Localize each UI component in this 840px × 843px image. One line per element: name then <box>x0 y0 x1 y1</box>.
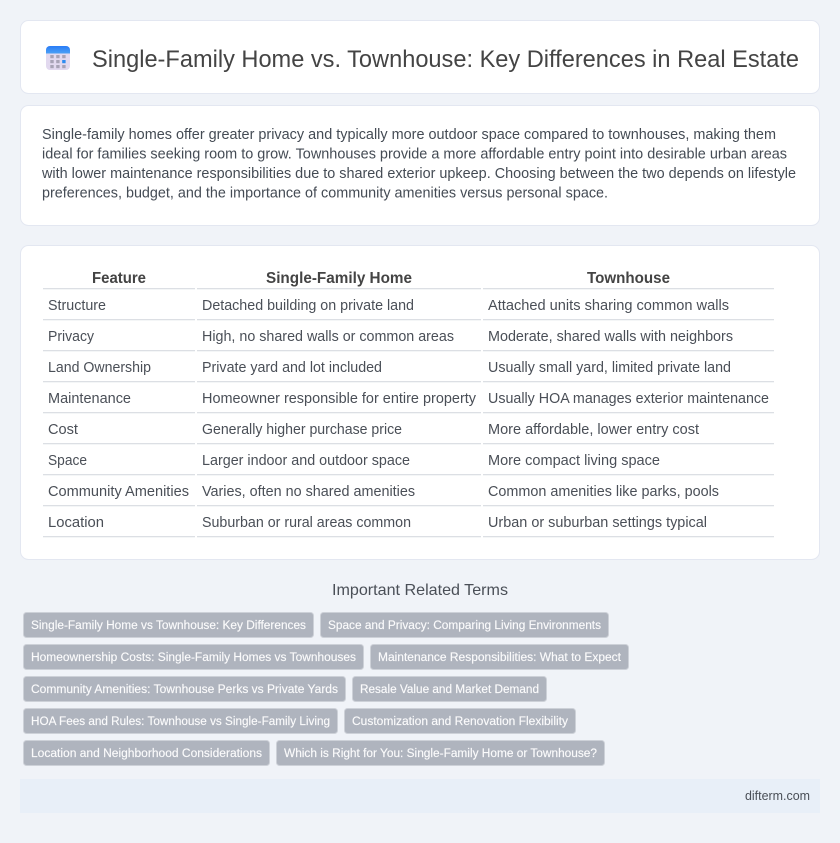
row: maintenance <box>48 391 769 407</box>
footer site name: difterm.com <box>745 789 810 803</box>
tag: Single-Family Home vs Townhouse: Key Differences <box>31 618 306 632</box>
row: privacy: High, no shared walls or common areas <box>202 329 454 345</box>
row: location: Location <box>48 515 104 531</box>
row: land ownership: Land Ownership <box>48 360 151 376</box>
row: cost: Cost <box>48 422 78 438</box>
row: structure: Attached units sharing common walls <box>488 298 729 314</box>
row: land ownership: Private yard and lot included <box>202 360 382 376</box>
header panel <box>20 20 820 94</box>
row: maintenance: Usually HOA manages exterior maintenance <box>488 391 769 407</box>
text block: introduction <box>41 127 796 202</box>
footer <box>20 779 820 813</box>
tag <box>24 644 364 670</box>
row: space: Space <box>48 453 87 469</box>
tag: Customization and Renovation Flexibility <box>352 714 569 728</box>
table header row <box>92 270 670 287</box>
row: location: Suburban or rural areas common <box>202 515 411 531</box>
tag <box>24 740 270 766</box>
row: maintenance: Homeowner responsible for entire property <box>202 391 477 407</box>
tag: Resale Value and Market Demand <box>360 682 539 696</box>
row: structure <box>48 298 729 314</box>
table header row: Single-Family Home <box>266 270 412 287</box>
row: space: Larger indoor and outdoor space <box>202 453 410 469</box>
tag <box>344 708 576 734</box>
tag: Maintenance Responsibilities: What to Expect <box>378 650 622 664</box>
row: privacy <box>48 329 733 345</box>
row: location <box>48 515 707 531</box>
row: privacy: Moderate, shared walls with neighbors <box>488 329 733 345</box>
table header row: Feature <box>92 270 146 287</box>
tag: Space and Privacy: Comparing Living Environments <box>328 618 601 632</box>
tag <box>276 740 604 766</box>
table row lines <box>43 288 774 537</box>
row: community amenities: Community Amenities <box>48 484 189 500</box>
heading: important related terms: Important Related Terms <box>332 582 508 599</box>
text block: introduction: with lower maintenance responsibilities due to shared exterior upkeep. Choosing between the two depends on lifestyle <box>41 166 796 182</box>
row: community amenities: Varies, often no shared amenities <box>202 484 415 500</box>
row: maintenance: Maintenance <box>48 391 131 407</box>
tag <box>370 644 628 670</box>
row: community amenities: Common amenities like parks, pools <box>488 484 719 500</box>
tag <box>352 676 546 702</box>
row: structure: Detached building on private land <box>202 298 414 314</box>
tag <box>24 676 346 702</box>
row: land ownership <box>48 360 731 376</box>
title: Single-Family Home vs. Townhouse: Key Differences in Real Estate <box>92 46 799 73</box>
tag: HOA Fees and Rules: Townhouse vs Single-Family Living <box>31 714 330 728</box>
row: space: More compact living space <box>488 453 660 469</box>
row: privacy: Privacy <box>48 329 95 345</box>
tag <box>24 708 338 734</box>
tag <box>320 612 608 638</box>
row: cost: Generally higher purchase price <box>202 422 402 438</box>
panel: related term tags <box>24 612 628 766</box>
panel: comparison table <box>20 246 820 560</box>
row: structure: Structure <box>48 298 106 314</box>
row: land ownership: Usually small yard, limited private land <box>488 360 731 376</box>
row: cost: More affordable, lower entry cost <box>488 422 699 438</box>
tag <box>24 612 314 638</box>
text block: introduction: preferences, budget, and the importance of community amenities versus personal space. <box>42 186 608 202</box>
icon: calendar <box>46 46 70 70</box>
tag: Community Amenities: Townhouse Perks vs Private Yards <box>31 682 338 696</box>
row: location: Urban or suburban settings typical <box>488 515 707 531</box>
tag: Which is Right for You: Single-Family Home or Townhouse? <box>284 746 597 760</box>
row: community amenities <box>48 484 719 500</box>
table header row: Townhouse <box>587 270 670 287</box>
row: cost <box>48 422 699 438</box>
text block: introduction: Single-family homes offer greater privacy and typically more outdoor space compared to townhouses, making them <box>42 127 776 143</box>
text block: introduction: ideal for families seeking room to grow. Townhouses provide a more affordable entry point into desirable urban areas <box>42 146 787 162</box>
tag: Location and Neighborhood Considerations <box>31 746 262 760</box>
tag: Homeownership Costs: Single-Family Homes vs Townhouses <box>31 650 356 664</box>
row: space <box>48 453 660 469</box>
panel: introduction <box>20 106 820 226</box>
